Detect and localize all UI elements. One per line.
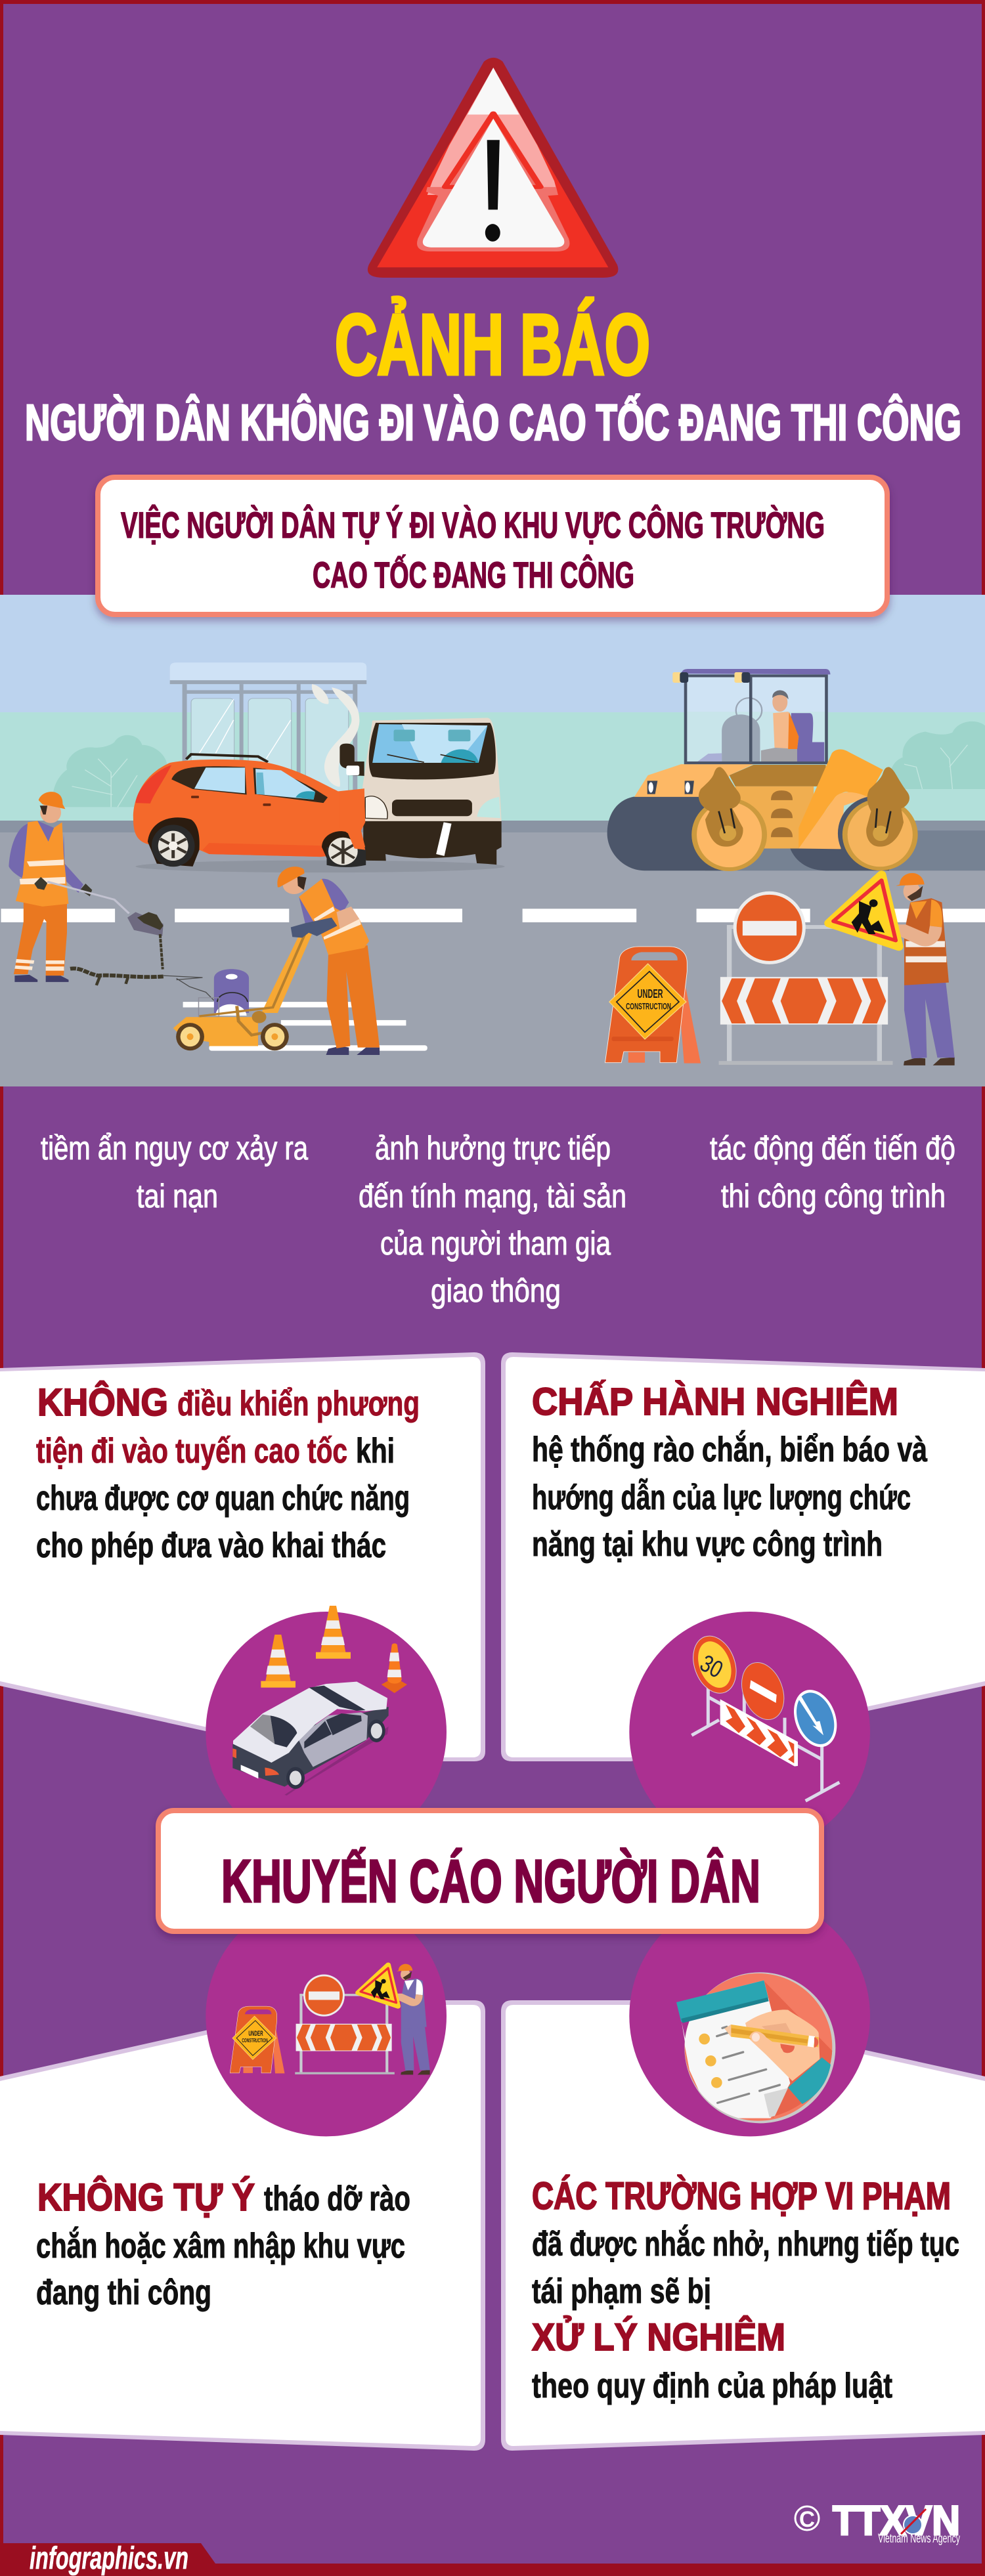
text: strictly comply: năng tại khu vực công trình — [532, 1525, 883, 1564]
text column: construction progress: thi công công trình — [721, 1178, 946, 1214]
smoke — [312, 684, 359, 787]
worker — [358, 1964, 430, 2074]
box: intro statement — [98, 477, 887, 614]
hand and pencil — [724, 2009, 820, 2081]
icon: warning triangle — [368, 58, 618, 278]
box: recommendation heading: KHUYẾN CÁO NGƯỜI DÂN — [221, 1847, 760, 1915]
text: do not drive onto expressway: tiện đi vào tuyến cao tốc — [36, 1432, 347, 1470]
box: intro statement: CAO TỐC ĐANG THI CÔNG — [313, 554, 634, 595]
chevron board — [720, 1699, 798, 1767]
text: do not dismantle barriers: chắn hoặc xâm nhập khu vực — [36, 2226, 405, 2265]
text column: life and property — [359, 1130, 626, 1309]
under construction A-frame sign: UNDER — [638, 987, 663, 1001]
truck — [339, 718, 502, 868]
road dashes — [1, 909, 462, 1051]
sky and grass and road — [0, 595, 985, 1086]
bush left — [53, 735, 168, 807]
panel: top-right card — [501, 1352, 985, 1761]
icon: road signs barrier — [629, 1612, 870, 1853]
text: strictly comply — [532, 1381, 927, 1564]
bush right — [890, 721, 985, 789]
text: do not drive onto expressway: cho phép đưa vào khai thác — [36, 1526, 386, 1565]
icon: triangle road works sign — [829, 875, 899, 947]
frame — [691, 1685, 839, 1801]
road dashes — [523, 909, 985, 922]
orange car — [133, 754, 366, 867]
text: do not dismantle barriers: đang thi công — [36, 2273, 211, 2312]
road shadow — [705, 830, 985, 870]
text column: construction progress — [710, 1130, 955, 1214]
left half of the scene — [1, 662, 505, 1055]
icon: car and traffic cones — [206, 1606, 447, 1853]
under construction A-frame sign: CONSTRUCTION — [626, 1002, 671, 1012]
worker with shovel — [9, 792, 164, 982]
right half of the scene — [523, 669, 985, 1065]
text: violations handled strictly: theo quy định của pháp luật — [532, 2367, 892, 2405]
A-frame sign: UNDER — [248, 2030, 263, 2038]
blue direction sign — [786, 1684, 844, 1753]
text: do not drive onto expressway: KHÔNG — [37, 1381, 168, 1424]
text column: life and property: giao thông — [431, 1272, 561, 1309]
asphalt machine — [173, 927, 315, 1050]
no-entry sign — [734, 1656, 791, 1726]
text: violations handled strictly: XỬ LÝ NGHIÊM — [532, 2316, 785, 2359]
box: recommendation heading — [158, 1811, 821, 1931]
text: violations handled strictly: tái phạm sẽ bị — [532, 2272, 711, 2311]
A-frame sign: CONSTRUCTION — [242, 2037, 268, 2044]
A-frame sign — [230, 2006, 284, 2073]
text column: risk of accidents: tai nạn — [137, 1178, 218, 1214]
text column: risk of accidents: tiềm ẩn nguy cơ xảy ra — [41, 1130, 308, 1167]
silver car — [232, 1682, 389, 1795]
panel: bottom-right card — [501, 2000, 985, 2451]
text column: risk of accidents — [41, 1130, 308, 1214]
text column: life and property: của người tham gia — [380, 1225, 611, 1262]
panel: bottom-left card — [0, 2000, 485, 2451]
icon: barrier and worker on disc — [206, 1896, 447, 2136]
text: do not dismantle barriers: KHÔNG TỰ Ý — [37, 2176, 255, 2219]
under construction A-frame sign — [605, 947, 701, 1063]
worker holding triangle sign — [829, 873, 955, 1065]
icon: hand writing on notepad — [629, 1921, 870, 2136]
barrier with no-entry sign and chevrons — [719, 891, 893, 1065]
text column: life and property: đến tính mạng, tài sản — [359, 1178, 626, 1214]
text: strictly comply: CHẤP HÀNH NGHIÊM — [532, 1381, 898, 1423]
logo: TTXVN: TTXVN — [833, 2498, 960, 2544]
speed limit sign: 30 — [695, 1650, 727, 1684]
illustration: road construction scene — [0, 595, 985, 1086]
road roller — [607, 669, 918, 871]
footer: infographics.vn tag: infographics.vn — [30, 2541, 188, 2576]
text: do not dismantle barriers: tháo dỡ rào — [264, 2179, 410, 2218]
text: do not drive onto expressway — [36, 1381, 420, 1565]
logo: TTXVN: C — [799, 2507, 815, 2532]
speed limit sign — [686, 1630, 744, 1699]
panel: top-left card — [0, 1352, 485, 1761]
text: do not drive onto expressway: điều khiển phương — [177, 1385, 420, 1423]
roller cabin — [672, 669, 830, 763]
footer: infographics.vn tag — [0, 2541, 985, 2576]
barrier — [295, 1975, 395, 2074]
bullet lines — [699, 2027, 779, 2103]
sleeve and corner — [764, 2057, 831, 2117]
bus shelter — [170, 662, 366, 809]
cones — [261, 1606, 407, 1693]
notepad clipped to disc — [676, 1981, 834, 2118]
road crack — [70, 968, 214, 1000]
car shadow — [135, 861, 505, 872]
text: violations handled strictly — [532, 2175, 959, 2405]
text: do not drive onto expressway: chưa được cơ quan chức năng — [36, 1479, 410, 1518]
text column: life and property: ảnh hưởng trực tiếp — [375, 1130, 611, 1167]
text: do not dismantle barriers — [36, 2176, 410, 2312]
worker pushing machine — [277, 867, 380, 1055]
signs and worker — [230, 1964, 430, 2074]
text: do not drive onto expressway: khi — [356, 1432, 395, 1470]
title: Cảnh báo: CẢNH BÁO — [335, 296, 650, 393]
